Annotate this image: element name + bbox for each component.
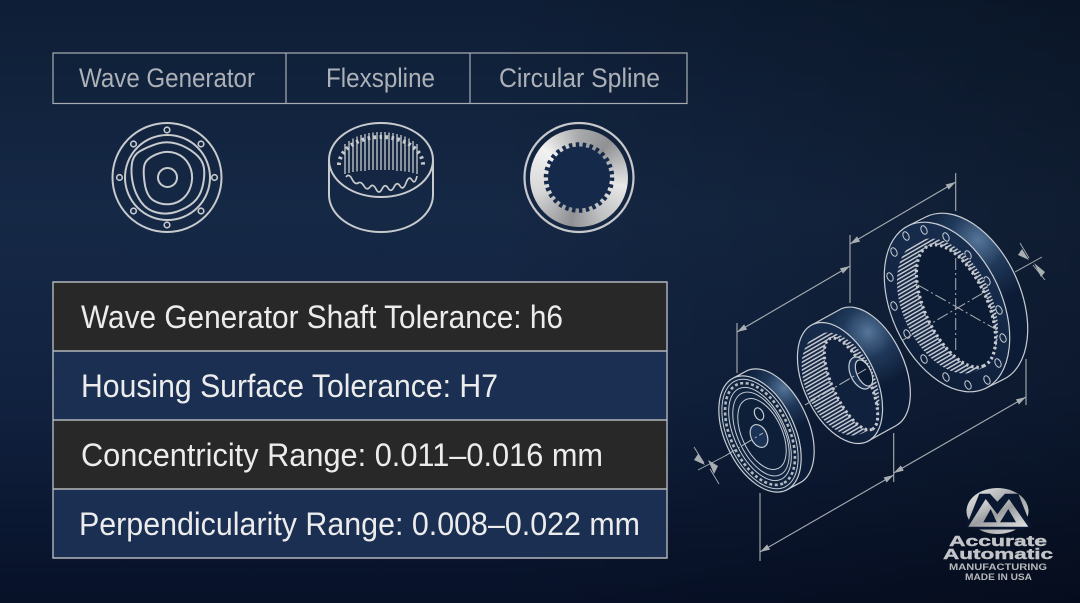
logo: Accurate Automatic: Automatic — [943, 546, 1053, 563]
logo: Accurate Automatic: MANUFACTURING — [949, 562, 1047, 573]
icon: flexspline — [329, 123, 433, 232]
heading: Wave Generator: Wave Generator — [79, 63, 255, 93]
logo emblem — [966, 488, 1032, 534]
row: perpendicularity — [53, 489, 667, 558]
logo: Accurate Automatic: MADE IN USA — [965, 572, 1032, 583]
heading: Flexspline: Flexspline — [326, 63, 435, 93]
row: perpendicularity: Perpendicularity Range: 0.008–0.022 mm — [79, 506, 640, 542]
logo: Accurate Automatic — [943, 488, 1053, 583]
exploded drawing — [694, 173, 1045, 561]
icon: circular spline — [524, 123, 634, 232]
row: housing tolerance — [53, 351, 667, 420]
row: concentricity — [53, 420, 667, 489]
spec table — [53, 282, 667, 558]
row: concentricity: Concentricity Range: 0.011–0.016 mm — [81, 437, 603, 473]
row: shaft tolerance — [53, 282, 667, 351]
dimension lines and arrows — [694, 173, 1045, 561]
part: large circular spline — [859, 202, 1035, 412]
heading: Circular Spline: Circular Spline — [499, 63, 660, 93]
logo wordmark: Accurate — [949, 533, 1047, 550]
icon: wave generator — [112, 123, 222, 232]
header row: component names — [53, 53, 687, 104]
row: housing tolerance: Housing Surface Tolerance: H7 — [81, 368, 498, 404]
part: flexspline — [780, 307, 910, 457]
part: wave generator — [702, 363, 818, 505]
row: shaft tolerance: Wave Generator Shaft Tolerance: h6 — [81, 299, 563, 335]
